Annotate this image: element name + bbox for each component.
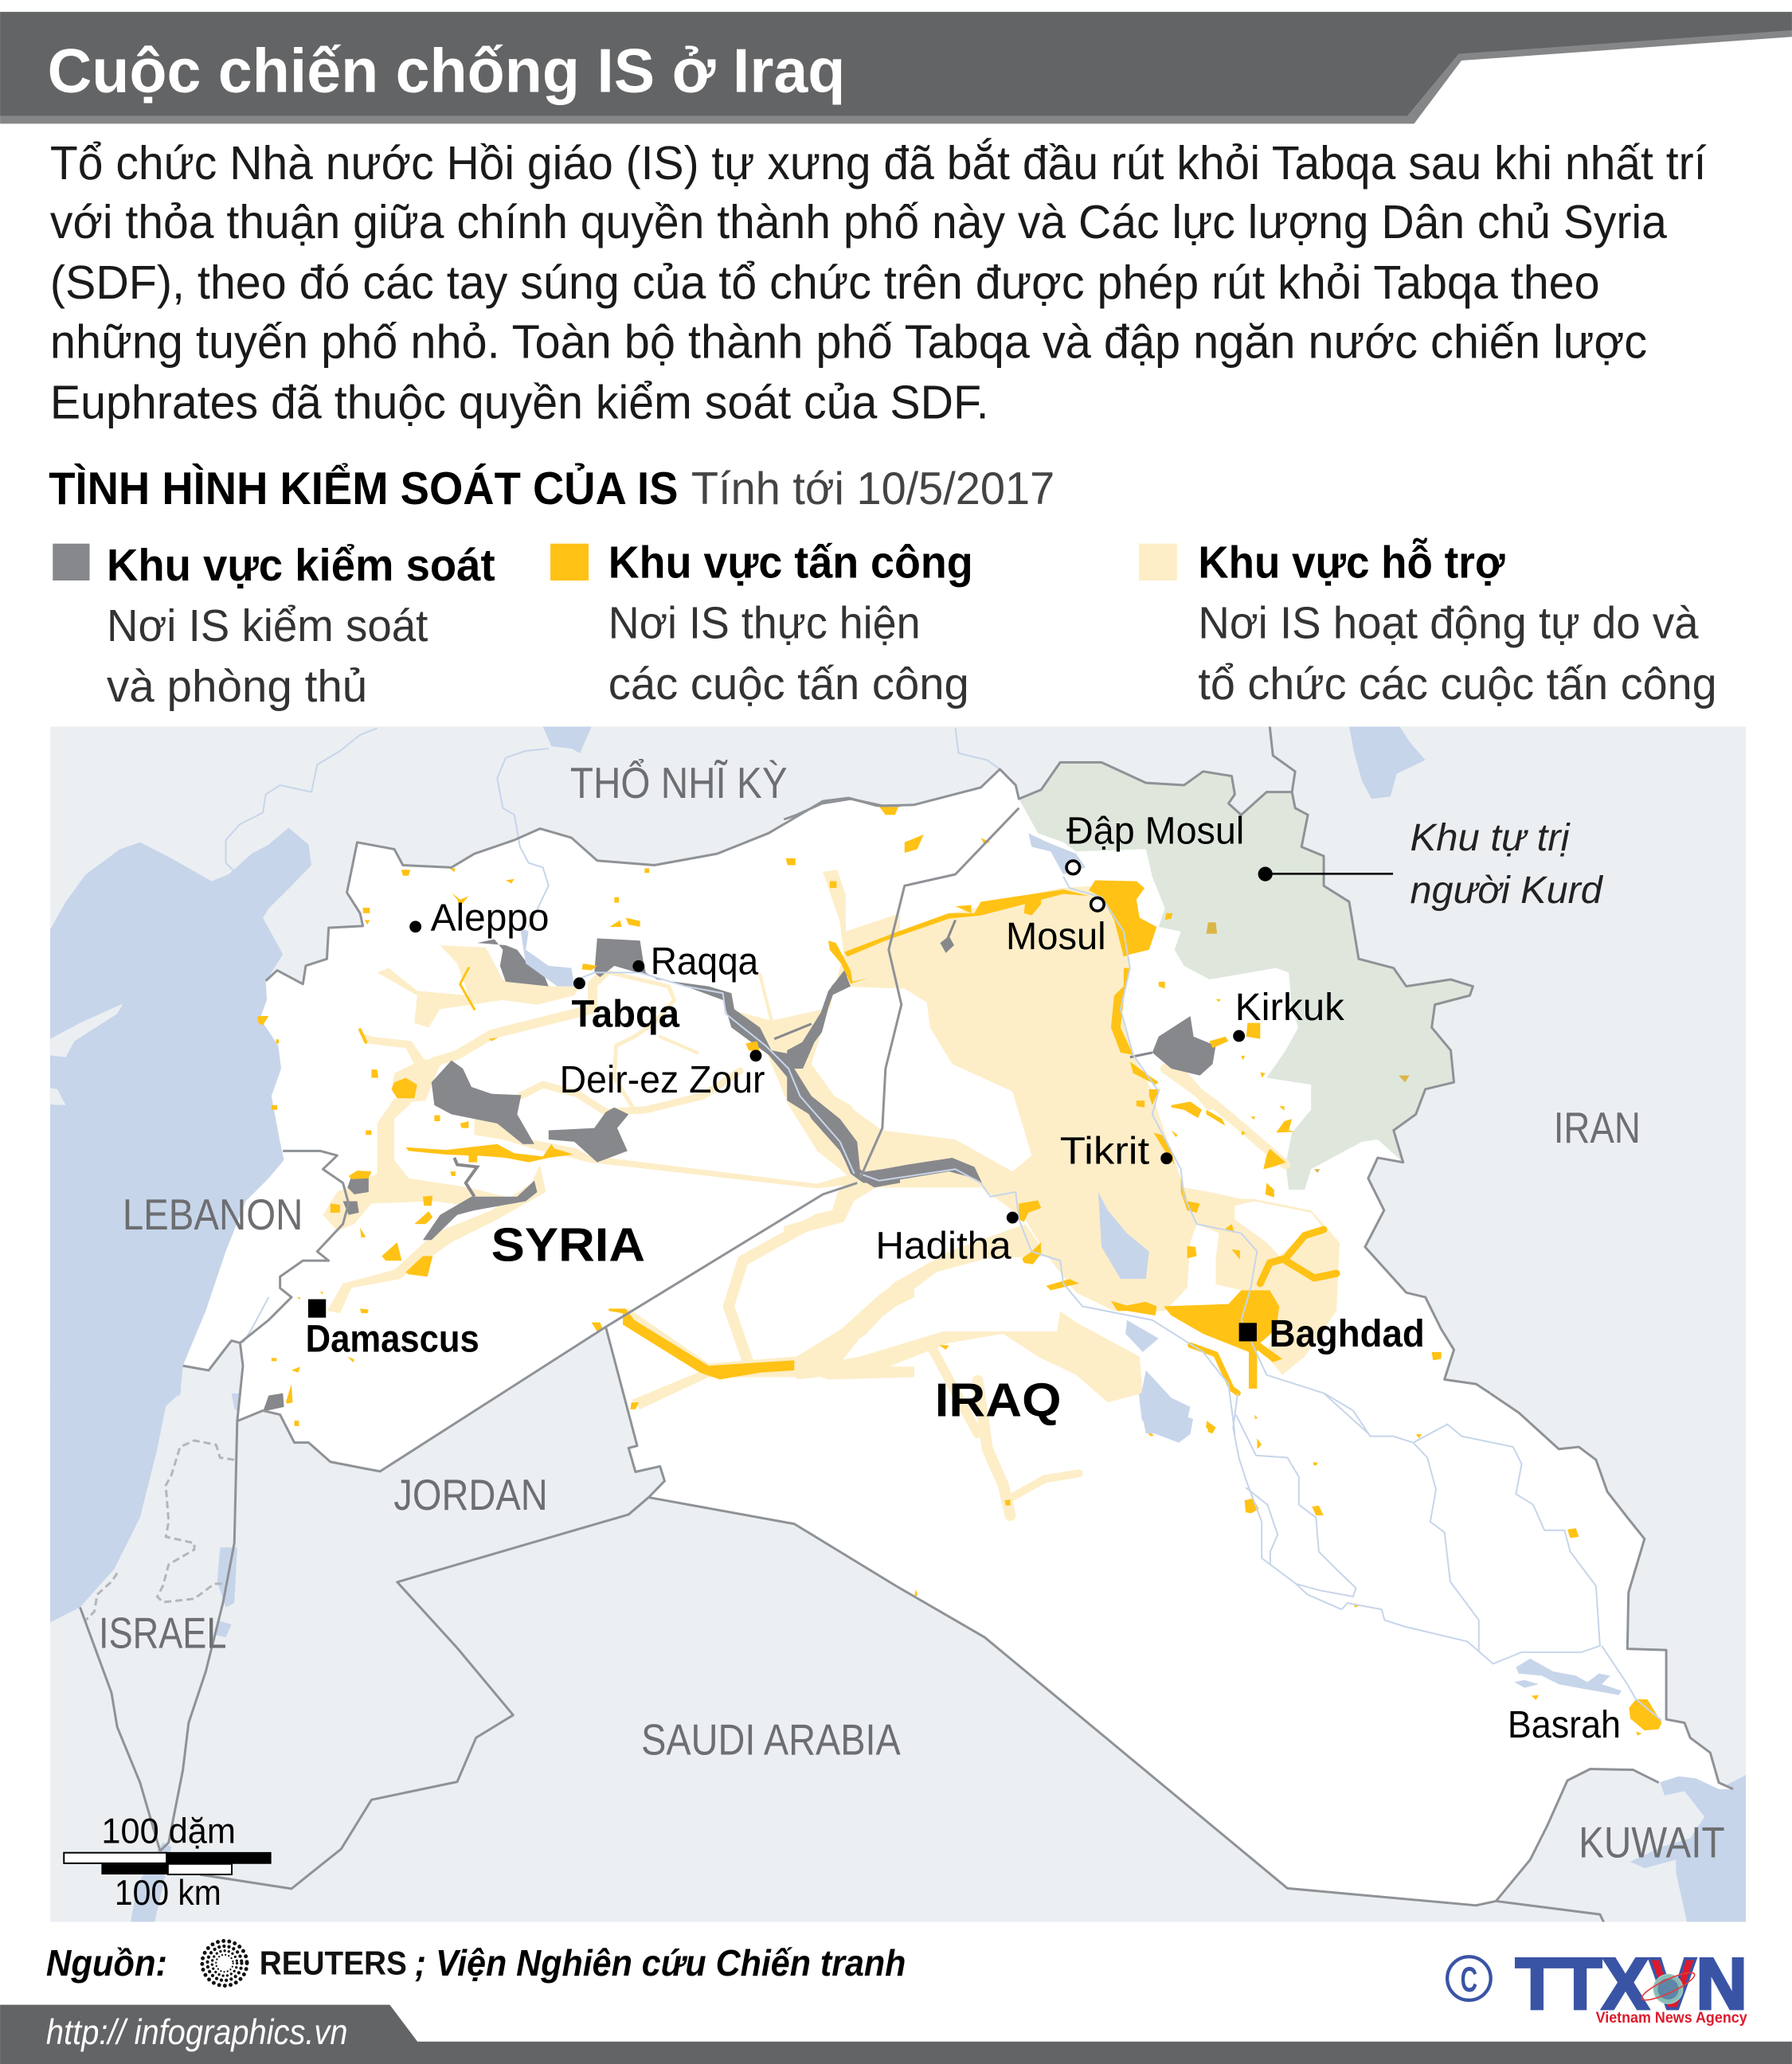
Kurdish region leader line [1258, 867, 1393, 882]
legend: attack areas: Khu vực tấn công [608, 538, 973, 588]
city labels [306, 811, 1621, 1746]
city markers [308, 861, 1257, 1341]
country labels: JORDAN [393, 1471, 548, 1519]
intro text block: Euphrates đã thuộc quyền kiểm soát của SDF. [50, 376, 989, 429]
country labels [99, 759, 1725, 1867]
country labels: LEBANON [123, 1190, 303, 1239]
legend: controlled areas: và phòng thủ [107, 661, 367, 711]
Kurdish region label: Khu tự trị [1411, 817, 1571, 859]
rivers and lakes [225, 728, 1661, 1721]
map section heading [49, 463, 1054, 514]
intro text block: Tổ chức Nhà nước Hồi giáo (IS) tự xưng đã bắt đầu rút khỏi Tabqa sau khi nhất trí [50, 136, 1707, 190]
icon: copyright symbol: C [1461, 1960, 1477, 2000]
city labels: Aleppo [431, 897, 549, 940]
Kurdish region label: người Kurd [1411, 870, 1603, 912]
legend: attack areas [550, 538, 973, 709]
IS controlled areas in Iraq [787, 897, 1216, 1183]
website url: http:// infographics.vn [46, 2013, 347, 2052]
icon: Reuters logo [202, 1941, 247, 1986]
country labels: IRAN [1554, 1104, 1641, 1152]
attack areas in southern Iraq [914, 1415, 1661, 1736]
seas and lakes outside the region [34, 727, 1747, 1924]
city labels: Baghdad [1270, 1313, 1425, 1355]
legend: support areas: Nơi IS hoạt động tự do và [1198, 598, 1699, 648]
Kurdish autonomous region [1019, 762, 1473, 1190]
map panel [34, 726, 1747, 1924]
city labels: Raqqa [651, 940, 759, 983]
map section heading: TÌNH HÌNH KIỂM SOÁT CỦA IS [49, 463, 678, 514]
source line: ; Viện Nghiên cứu Chiến tranh [415, 1942, 906, 1984]
city labels: Kirkuk [1235, 987, 1345, 1029]
map section heading: Tính tới 10/5/2017 [691, 463, 1054, 514]
support areas in Iraq [784, 885, 1340, 1433]
country labels: ISRAEL [99, 1609, 226, 1658]
city labels: Haditha [875, 1225, 1011, 1267]
Kurdish region label [1411, 817, 1603, 912]
IS controlled areas in Syria [263, 938, 900, 1412]
legend: support areas [1139, 538, 1717, 709]
land: Syria, Lebanon and Iraq [183, 762, 1733, 1906]
icon: copyright symbol [1447, 1956, 1491, 2000]
source line: REUTERS [260, 1945, 407, 1982]
agency logo: Vietnam News Agency [1596, 2009, 1747, 2027]
Iraq label: IRAQ [935, 1374, 1061, 1427]
scale bar: 100 km [115, 1874, 221, 1913]
intro text block: với thỏa thuận giữa chính quyền thành phố này và Các lực lượng Dân chủ Syria [50, 195, 1668, 248]
legend: controlled areas: Khu vực kiểm soát [107, 540, 495, 590]
country labels: SAUDI ARABIA [641, 1716, 901, 1765]
intro text block [50, 136, 1707, 429]
footer bar [0, 2005, 1792, 2064]
attack areas in Iraq [828, 807, 1442, 1433]
agency logo: TTXVN [1516, 1945, 1747, 2025]
city labels: Đập Mosul [1066, 811, 1244, 853]
city labels: Damascus [306, 1319, 479, 1361]
legend: support areas: Khu vực hỗ trợ [1198, 538, 1505, 588]
source line [46, 1942, 906, 1984]
source line: Nguồn: [46, 1942, 167, 1984]
legend: attack areas: các cuộc tấn công [608, 659, 969, 709]
title: Cuộc chiến chống IS ở Iraq [48, 37, 845, 106]
city labels: Tabqa [572, 993, 679, 1035]
attack areas in Syria [257, 858, 836, 1426]
country borders [80, 727, 1733, 1924]
legend: controlled areas [53, 540, 495, 711]
country labels: KUWAIT [1579, 1818, 1725, 1867]
Syria label: SYRIA [491, 1218, 645, 1272]
country labels: THỔ NHĨ KỲ [570, 759, 788, 807]
scale bar: 100 dặm [101, 1812, 236, 1851]
header banner [0, 12, 1792, 123]
legend: controlled areas: Nơi IS kiểm soát [107, 600, 428, 651]
intro text block: những tuyến phố nhỏ. Toàn bộ thành phố Tabqa và đập ngăn nước chiến lược [50, 315, 1647, 369]
city labels: Mosul [1006, 916, 1106, 958]
city labels: Basrah [1508, 1704, 1621, 1746]
city labels: Tikrit [1060, 1130, 1149, 1172]
legend: attack areas: Nơi IS thực hiện [608, 598, 921, 648]
legend: support areas: tổ chức các cuộc tấn công [1198, 659, 1717, 709]
scale bar [63, 1817, 272, 1905]
support areas in Syria [323, 870, 914, 1409]
unoccupied areas inside support zones [822, 987, 1327, 1292]
intro text block: (SDF), theo đó các tay súng của tổ chức trên được phép rút khỏi Tabqa theo [50, 256, 1600, 309]
city labels: Deir-ez Zour [560, 1059, 765, 1101]
